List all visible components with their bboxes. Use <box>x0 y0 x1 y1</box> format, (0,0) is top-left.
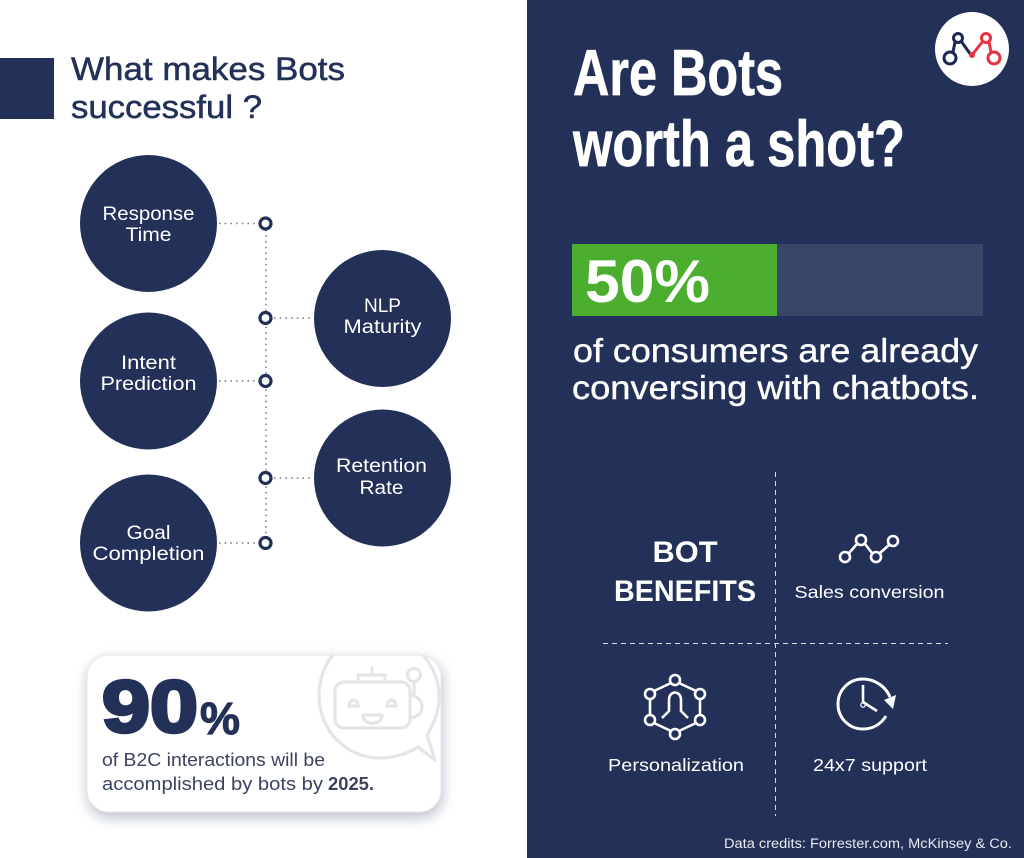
callout: 90% statistic card: accomplished by bots by <box>102 773 324 794</box>
title: Are Bots worth a shot?: Are Bots <box>573 36 783 109</box>
text: consumers statement: conversing with chatbots. <box>572 369 979 406</box>
icon: line chart <box>840 535 898 562</box>
node: Goal Completion: Goal <box>126 523 170 544</box>
text: 90% description: of B2C interactions will be <box>102 749 325 770</box>
panel: right background <box>527 0 1024 858</box>
benefit: Sales conversion <box>794 535 944 602</box>
heading: Bot Benefits: BENEFITS <box>614 575 756 608</box>
heading: Bot Benefits <box>614 536 756 608</box>
callout: 90% statistic card <box>87 655 441 812</box>
heading marker square <box>0 58 54 119</box>
icon: clock <box>838 679 890 729</box>
node: NLP Maturity: Maturity <box>344 317 422 338</box>
node: Goal Completion: Completion <box>92 544 204 565</box>
benefit: Personalization: Personalization <box>608 755 744 775</box>
node: Intent Prediction: Prediction <box>100 374 196 395</box>
heading: What makes Bots successful: What makes Bots <box>71 51 345 87</box>
benefit: 24x7 support: 24x7 support <box>813 755 927 775</box>
icon: logo <box>935 12 1009 86</box>
node: Response Time: Time <box>126 225 172 246</box>
progress bar: 50%: 50% <box>585 248 710 315</box>
stat: 90%: 90 <box>102 667 198 748</box>
benefit: 24x7 support <box>813 679 927 775</box>
icon: robot chat bubble watermark <box>319 655 439 760</box>
node: NLP Maturity <box>314 250 451 387</box>
node: Goal Completion <box>80 474 217 612</box>
node: Intent Prediction <box>80 312 217 450</box>
node: Response Time <box>80 155 217 292</box>
heading: What makes Bots successful <box>71 51 345 125</box>
icon: person network <box>645 675 705 739</box>
node: Retention Rate <box>314 410 451 546</box>
benefit: Personalization <box>608 675 744 775</box>
progress bar: 50% <box>572 244 983 316</box>
title: Are Bots worth a shot?: worth a shot? <box>572 107 905 180</box>
connector diagram <box>219 218 314 548</box>
node: Intent Prediction: Intent <box>121 353 177 374</box>
node: Retention Rate: Rate <box>360 478 404 499</box>
callout: 90% statistic card: 2025. <box>328 774 374 794</box>
title: Are Bots worth a shot? <box>572 36 905 180</box>
node: Response Time: Response <box>102 204 194 225</box>
node: Retention Rate: Retention <box>336 456 427 477</box>
benefit: Sales conversion: Sales conversion <box>794 582 944 602</box>
heading: What makes Bots successful: successful ? <box>71 89 262 125</box>
heading: Bot Benefits: BOT <box>652 536 718 569</box>
text: data credits: Data credits: Forrester.com, McKinsey & Co. <box>724 836 1012 851</box>
node: NLP Maturity: NLP <box>364 296 401 317</box>
text: consumers statement <box>572 332 979 406</box>
callout: 90% statistic card: % <box>200 693 240 744</box>
text: consumers statement: of consumers are already <box>573 332 979 369</box>
